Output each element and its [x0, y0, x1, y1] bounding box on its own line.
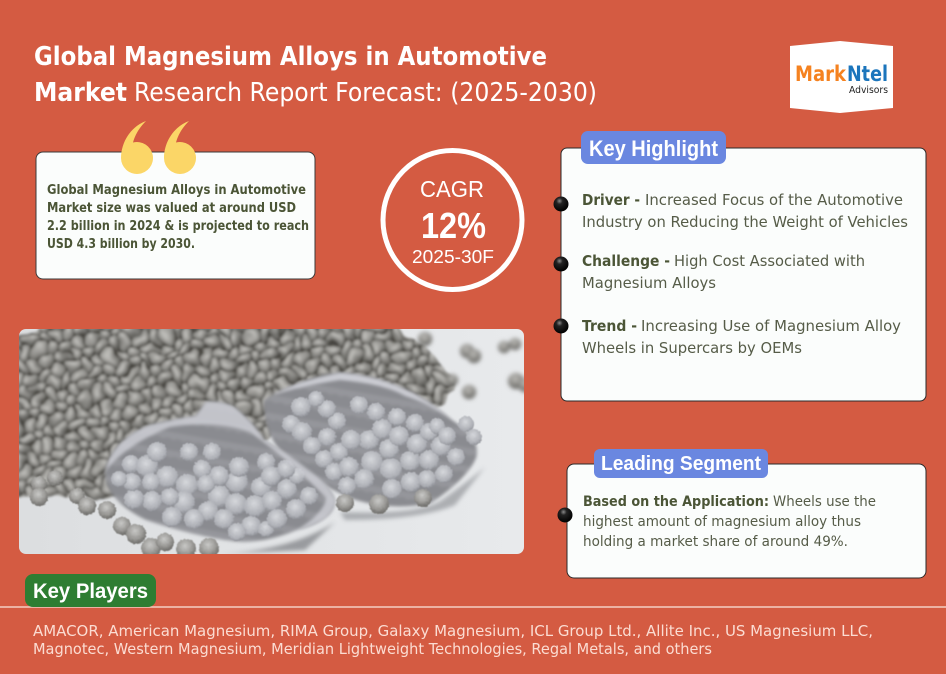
stray pellets top right	[418, 332, 532, 399]
heading: key players: Key Players	[33, 580, 148, 603]
icon: quotation marks	[121, 121, 196, 174]
CAGR circle: 2025-30F	[412, 247, 494, 267]
title: Market	[34, 78, 127, 108]
photo: magnesium alloy pellets in mesh bags	[5, 322, 532, 559]
panel: market size summary: Global Magnesium Alloys in Automotive	[47, 183, 306, 198]
challenge text: Magnesium Alloys	[582, 274, 716, 292]
trend text: Wheels in Supercars by OEMs	[582, 339, 802, 357]
floor shadows	[236, 523, 333, 554]
trend text: Trend -	[582, 317, 637, 335]
driver text	[582, 191, 908, 231]
panel: market size summary: 2.2 billion in 2024 & is projected to reach	[47, 219, 309, 234]
driver text: Industry on Reducing the Weight of Vehicles	[582, 213, 908, 231]
key players list: AMACOR, American Magnesium, RIMA Group, Galaxy Magnesium, ICL Group Ltd., Allite Inc., US Magnesium LLC,	[33, 622, 873, 640]
challenge text: High Cost Associated with	[674, 252, 865, 270]
leading segment text: holding a market share of around 49%.	[583, 534, 848, 550]
key players list: Magnotec, Western Magnesium, Meridian Lightweight Technologies, Regal Metals, and others	[33, 640, 712, 658]
heading: leading segment: Leading Segment	[601, 453, 761, 475]
CAGR circle	[383, 150, 522, 290]
driver text: Driver -	[582, 191, 640, 209]
right bag pellets	[282, 391, 482, 499]
key players list	[33, 622, 873, 658]
title: Global Magnesium Alloys in Automotive	[34, 42, 547, 72]
bullet	[558, 508, 572, 522]
heading: key highlight	[581, 131, 726, 164]
trend text: Increasing Use of Magnesium Alloy	[641, 317, 901, 335]
loose pellets	[30, 470, 432, 559]
mesh bag right	[264, 372, 482, 507]
background pellets	[5, 322, 452, 498]
panel: key highlight	[554, 131, 926, 401]
challenge text: Challenge -	[582, 252, 670, 270]
panel: key players	[0, 574, 946, 658]
CAGR circle: 12%	[421, 205, 486, 246]
left bag pellets	[111, 442, 318, 541]
panel: leading segment	[558, 449, 926, 578]
driver text: Increased Focus of the Automotive	[645, 191, 903, 209]
title	[34, 42, 597, 108]
bullets	[554, 196, 568, 334]
logo: MarkNtel Advisors: Ntel	[847, 62, 888, 86]
leading segment text	[583, 494, 876, 550]
CAGR circle: CAGR	[420, 176, 484, 202]
title: Research Report Forecast: (2025-2030)	[134, 78, 597, 108]
panel: market size summary: USD 4.3 billion by 2030.	[47, 237, 195, 252]
leading segment text: Based on the Application:	[583, 494, 769, 510]
heading: key highlight: Key Highlight	[589, 136, 719, 161]
leading segment text: Wheels use the	[773, 494, 876, 510]
leading segment text: highest amount of magnesium alloy thus	[583, 514, 861, 530]
mesh bag left	[105, 402, 335, 542]
panel: market size summary: Market size was valued at around USD	[47, 201, 296, 216]
logo: MarkNtel Advisors: Mark	[795, 62, 847, 86]
heading: key players	[25, 574, 156, 607]
panel: market size summary	[36, 152, 315, 279]
challenge text	[582, 252, 865, 292]
trend text	[582, 317, 901, 357]
logo: MarkNtel Advisors: Advisors	[849, 85, 888, 96]
logo: MarkNtel Advisors	[790, 41, 893, 113]
